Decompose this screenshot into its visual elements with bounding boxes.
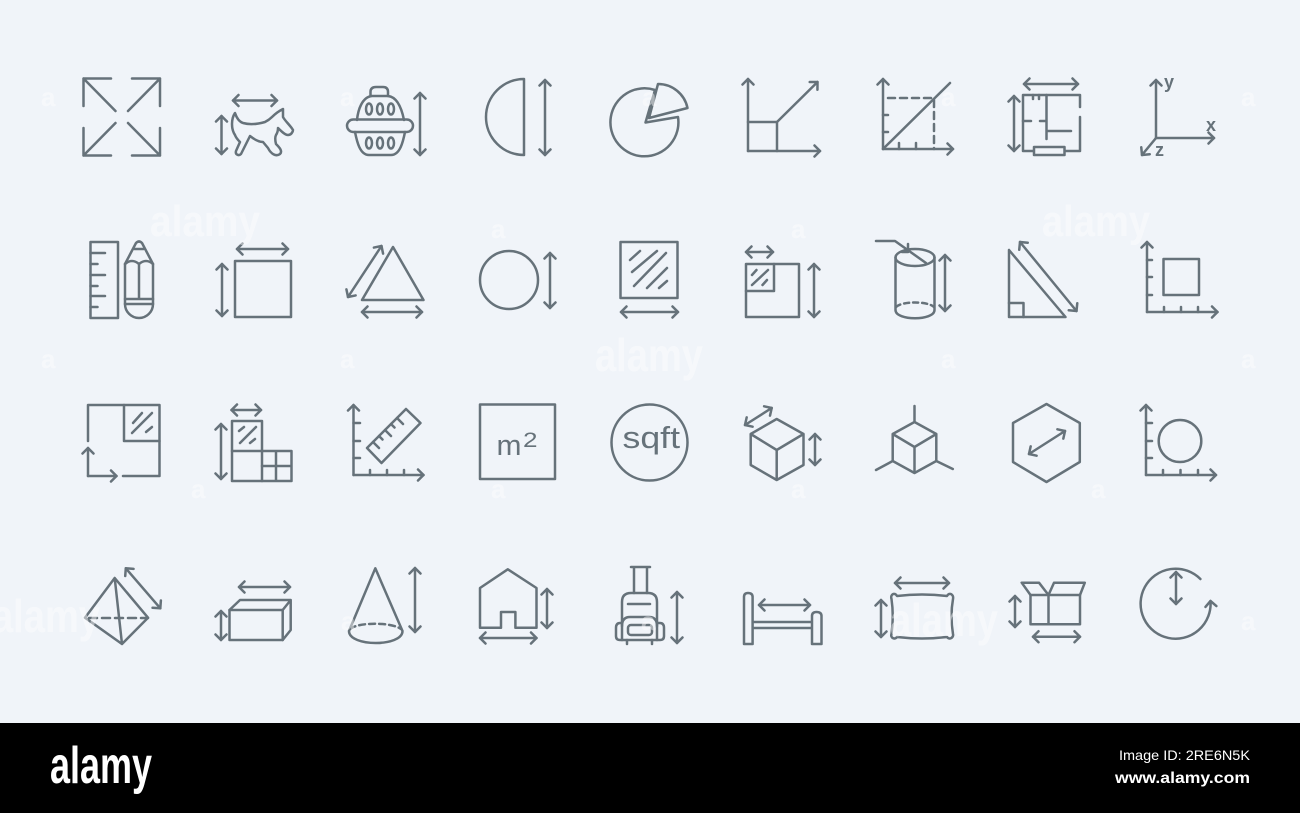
icon: ruler and pencil (90, 242, 153, 318)
watermark overlay: a (340, 344, 355, 374)
icon: sqft circle (612, 404, 688, 480)
icon: square metre (480, 404, 555, 479)
footer bar: alamy (50, 737, 152, 795)
footer bar: www.alamy.com (1114, 770, 1250, 787)
icon: sqft circle: sqft (622, 420, 680, 455)
icon: pet carrier (347, 87, 420, 155)
watermark overlay: a (491, 474, 506, 504)
watermark overlay: a (341, 606, 356, 636)
icon: xyz axes (1142, 72, 1216, 160)
watermark overlay: a (641, 606, 656, 636)
watermark overlay: a (1241, 606, 1256, 636)
icon: right triangle (1009, 242, 1076, 317)
icon grid (84, 72, 1218, 644)
icon: hexagon diagonal (1013, 404, 1080, 482)
icon: pillow (881, 583, 953, 638)
icon: cone (349, 568, 415, 643)
watermark overlay: a (1241, 82, 1256, 112)
footer bar: Image ID: 2RE6N5K (1119, 747, 1251, 763)
footer bar (0, 723, 1300, 813)
watermark overlay (0, 82, 1256, 646)
watermark overlay: alamy (150, 197, 260, 246)
icon: dog size (222, 100, 293, 155)
icon: square metre: 2 (523, 429, 538, 452)
icon: xyz axes: z (1155, 140, 1164, 160)
icon: ruler on axes (354, 405, 424, 475)
watermark overlay: a (41, 344, 56, 374)
icon: bed (744, 593, 822, 644)
icon: pie chart (610, 84, 688, 156)
watermark overlay: a (642, 82, 657, 112)
icon: open box (1015, 583, 1085, 637)
icon: half circle (486, 79, 545, 155)
watermark overlay: a (791, 214, 806, 244)
icon: 3D axes cube (876, 406, 953, 473)
watermark overlay: a (340, 82, 355, 112)
icon: luggage (616, 567, 677, 644)
icon: square with quarter tile (746, 252, 814, 317)
icon: square and axes diagonal (748, 79, 820, 151)
icon: pyramid (85, 568, 160, 644)
icon: circle on axes (1146, 405, 1216, 475)
icon: square on axes (1147, 242, 1218, 312)
icon: glass square (620, 242, 678, 312)
icon: triangle dimensions (348, 246, 424, 312)
watermark overlay: a (191, 474, 206, 504)
icon: xyz axes: x (1206, 115, 1216, 135)
icon: house (480, 569, 547, 638)
icon: square dimensions (222, 249, 291, 317)
icon: circle diameter (480, 251, 550, 309)
icon: diagonal chart (883, 79, 953, 149)
icon: tiles (221, 410, 292, 481)
icon: cylinder (876, 241, 945, 318)
watermark overlay: a (941, 344, 956, 374)
watermark overlay: a (491, 214, 506, 244)
watermark overlay: a (1241, 344, 1256, 374)
icon: cube (745, 408, 815, 480)
watermark overlay: alamy (1042, 197, 1150, 246)
icon: expand arrows (84, 78, 160, 156)
watermark overlay: a (1091, 474, 1106, 504)
watermark overlay: a (941, 82, 956, 112)
icon: room corner tile (88, 405, 160, 476)
watermark overlay: a (791, 474, 806, 504)
icon: floor plan (1014, 84, 1080, 155)
icon: box dimensions (221, 587, 291, 640)
watermark overlay: alamy (890, 594, 998, 646)
icon: xyz axes: y (1164, 72, 1174, 92)
icon: square metre: m (496, 430, 522, 462)
icon: rotate with arrow (1141, 569, 1211, 639)
watermark overlay: a (41, 82, 56, 112)
watermark overlay: alamy (595, 329, 703, 381)
